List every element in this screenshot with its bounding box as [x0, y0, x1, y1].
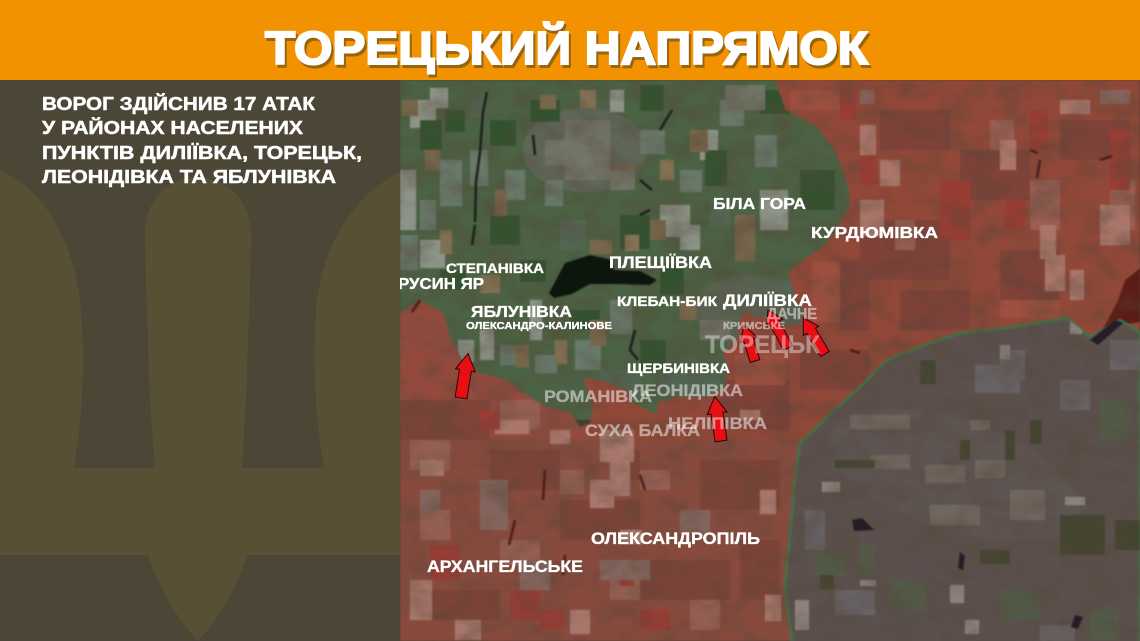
arrow: Дачне [796, 313, 833, 359]
satellite terrain: Ukrainian-held green area [400, 80, 860, 420]
label: Романівка: РОМАНІВКА [544, 387, 652, 406]
title: ТОРЕЦЬКИЙ НАПРЯМОК [267, 25, 871, 77]
header banner [0, 0, 1140, 80]
arrow: Неліпівка [705, 395, 731, 442]
occupied territory: red overlay [400, 80, 1140, 641]
label: Кримське: КРИМСЬКЕ [723, 321, 785, 332]
label: Архангельське: АРХАНГЕЛЬСЬКЕ [427, 557, 583, 576]
label: Диліївка: ДИЛІЇВКА [723, 291, 812, 310]
text block: attacks summary: ВОРОГ ЗДІЙСНИВ 17 АТАК [42, 93, 316, 114]
text block: attacks summary [42, 93, 362, 187]
label: Торецьк: ТОРЕЦЬК [705, 331, 821, 359]
label: Курдюмівка: КУРДЮМІВКА [811, 225, 939, 242]
grey eastern territory [785, 318, 1140, 641]
label: Плещіївка: ПЛЕЩІЇВКА [609, 253, 712, 272]
label: Неліпівка: НЕЛІПІВКА [668, 414, 767, 433]
map panel [400, 80, 1140, 641]
left panel [0, 93, 400, 640]
dark red lake [1095, 268, 1140, 338]
label: Суха Балка: СУХА БАЛКА [585, 421, 700, 440]
label: Олександропіль: ОЛЕКСАНДРОПІЛЬ [591, 529, 760, 548]
arrow: Торецьк west [736, 323, 764, 364]
text block: attacks summary: ПУНКТІВ ДИЛІЇВКА, ТОРЕЦЬК, [42, 143, 362, 163]
label: Русин Яр: РУСИН ЯР [400, 276, 484, 293]
title: ТОРЕЦЬКИЙ НАПРЯМОК [265, 22, 869, 74]
label: Степанівка: СТЕПАНІВКА [446, 260, 544, 276]
label: Щербинівка: ЩЕРБИНІВКА [627, 360, 730, 376]
satellite texture [400, 80, 1140, 641]
label: Клебан-Бик: КЛЕБАН-БИК [617, 293, 717, 309]
watermark: trident [0, 170, 400, 641]
settlement labels [398, 196, 939, 576]
water bodies and streams [412, 92, 1123, 629]
label: Дачне: ДАЧНЕ [767, 306, 817, 323]
arrow: Яблунівка [451, 352, 478, 400]
label: Леонідівка: ЛЕОНІДІВКА [632, 381, 743, 400]
text block: attacks summary: У РАЙОНАХ НАСЕЛЕНИХ [42, 117, 303, 138]
lake [549, 255, 657, 298]
label: Яблунівка: ЯБЛУНІВКА [471, 304, 572, 321]
text block: attacks summary: ЛЕОНІДІВКА ТА ЯБЛУНІВКА [42, 167, 336, 187]
label: Біла Гора: БІЛА ГОРА [713, 196, 806, 213]
label: Олександро-Калинове: ОЛЕКСАНДРО-КАЛИНОВЕ [466, 320, 612, 332]
arrow: Торецьк centre [760, 306, 796, 352]
